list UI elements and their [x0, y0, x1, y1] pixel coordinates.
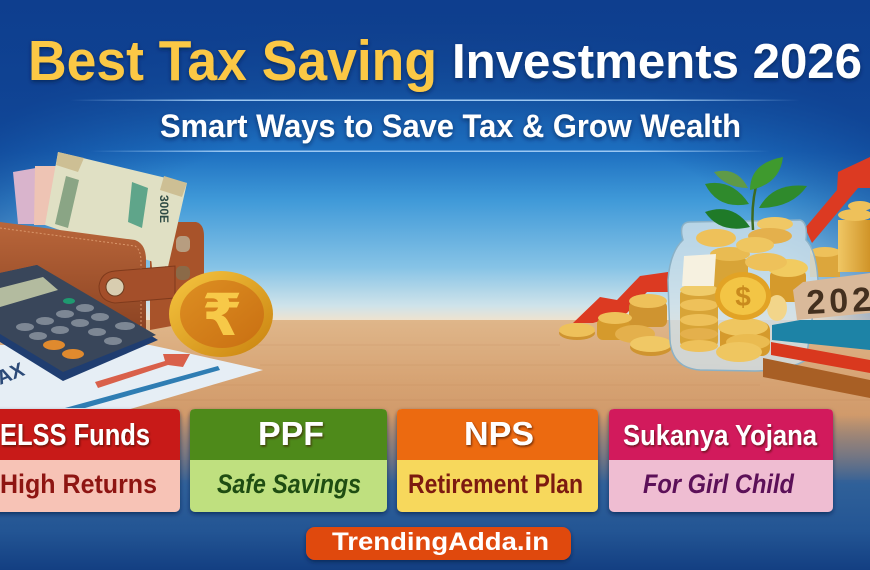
coin stacks left: [559, 294, 672, 356]
coin stacks right: [810, 201, 870, 277]
rupee coin: [169, 271, 273, 357]
title: [28, 29, 862, 93]
card: PPF: [190, 409, 387, 512]
background: sky gradient: [0, 0, 870, 330]
card: ELSS Funds: High Returns: [0, 469, 157, 499]
dollar coin: $: [735, 281, 751, 312]
pink notes: [13, 168, 36, 224]
main banknote: [45, 152, 187, 267]
footer badge: TrendingAdda.in: TrendingAdda.in: [332, 528, 549, 556]
wallet body: [0, 222, 146, 335]
card: ELSS Funds: ELSS Funds: [0, 417, 150, 452]
wallet strap: [99, 266, 175, 303]
jar coins: [680, 217, 808, 362]
calculator: [0, 265, 158, 381]
footer badge: TrendingAdda.in: [306, 527, 571, 560]
wallet back: [150, 222, 204, 330]
subtitle: Smart Ways to Save Tax & Grow Wealth: [160, 108, 741, 144]
glass highlight: [682, 254, 716, 286]
title: Best Tax Saving: [28, 29, 437, 93]
card: PPF: PPF: [258, 415, 324, 452]
wallet snap button: [106, 278, 124, 296]
card: Sukanya Yojana: For Girl Child: [643, 469, 794, 499]
card: Sukanya Yojana: Sukanya Yojana: [623, 420, 818, 452]
dollar coin: [715, 272, 771, 320]
illustration: coin jar, plant, growth arrow, books: [559, 157, 870, 398]
card: Sukanya Yojana: [609, 409, 833, 512]
tax paper: [0, 345, 263, 410]
card: NPS: Retirement Plan: [408, 469, 583, 499]
title: Investments 2026: [452, 35, 862, 89]
illustration: wallet, calculator, tax paper and rupee coin: [0, 152, 273, 410]
plant leaves: [705, 157, 807, 230]
banknote tail: [150, 244, 170, 268]
main banknote: 300E: [157, 195, 171, 223]
card: NPS: NPS: [464, 415, 534, 452]
red growth arrow: [573, 272, 668, 323]
rupee coin: ₹: [202, 281, 242, 349]
books: [763, 320, 870, 398]
wooden table: [0, 320, 870, 570]
card: ELSS Funds: [0, 409, 180, 512]
card: PPF: Safe Savings: [217, 469, 361, 499]
glass jar: [668, 217, 818, 371]
card: NPS: [397, 409, 598, 512]
